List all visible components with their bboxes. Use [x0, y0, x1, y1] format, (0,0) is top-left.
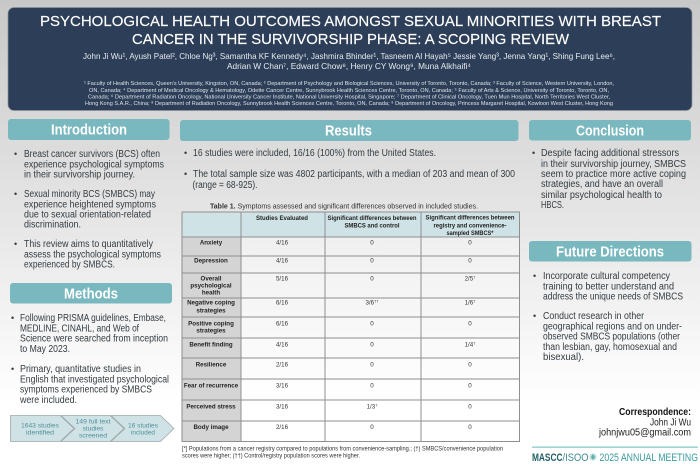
- authors: Adrian W Chan⁷, Edward Chow⁸, Henry CY Wong⁹, Muna Alkhaifi⁴: [227, 61, 471, 71]
- row: perceived stress: 1/3: [367, 404, 375, 410]
- footer: meeting logo: /ISOO: [562, 452, 589, 464]
- row: overall psychological health: 5/16: [276, 276, 289, 282]
- row: fear of recurrence: [184, 382, 472, 390]
- future directions bullets: •: [533, 311, 536, 321]
- correspondence: John Ji Wu: [650, 418, 691, 428]
- icon: meeting emblem: [589, 453, 597, 461]
- row: body image: 0: [370, 424, 374, 431]
- heading: methods: Methods: [64, 286, 118, 302]
- row: negative coping strategies: Negative coping: [187, 300, 235, 306]
- row: fear of recurrence: 0: [370, 382, 374, 390]
- row: fear of recurrence: 3/16: [276, 382, 289, 390]
- heading: conclusion: [529, 120, 691, 140]
- future directions bullets: than lesbian, gay, homosexual and: [543, 342, 677, 353]
- row: resilience: 2/16: [276, 362, 289, 368]
- conclusion bullet: in their survivorship journey, SMBCS: [541, 159, 686, 170]
- conclusion bullet: •: [532, 148, 535, 158]
- row: benefit finding: [189, 340, 475, 348]
- row: overall psychological health: 0: [370, 276, 374, 282]
- row: negative coping strategies: 6/16: [276, 300, 289, 306]
- chevron: full text screened: 149 full text: [76, 418, 111, 426]
- heading: future directions: Future Directions: [556, 244, 664, 260]
- row: body image: [193, 424, 472, 431]
- affiliations: ON, Canada; ⁴ Department of Medical Oncology & Hematology, Odette Cancer Centre, Sunnybrook Health Sciences Centre, Toronto, ON, Canada; ⁵ Faculty of Arts & Science, University of Toronto, Toronto, ON,: [89, 88, 609, 94]
- row: resilience: Resilience: [196, 362, 227, 368]
- methods bullets: symptoms experienced by SMBCS: [20, 384, 152, 396]
- heading: results: Results: [325, 122, 372, 140]
- row: overall psychological health: psychological: [190, 282, 232, 290]
- row: negative coping strategies: strategies: [196, 308, 226, 314]
- affiliations: Canada; ⁶ Department of Radiation Oncology, National University Cancer Institute, National University Hospital, Singapore; ⁷ Department of Clinical Oncology, Tuen Mun Hospital, North Territories West Cluster,: [88, 94, 610, 100]
- row: body image: 0: [468, 424, 472, 431]
- row: resilience: 0: [370, 362, 374, 368]
- chevron: studies included: 16 studies: [128, 422, 159, 430]
- row: overall psychological health: Overall: [201, 276, 222, 282]
- row: negative coping strategies: [187, 298, 475, 314]
- introduction bullets: experience psychological symptoms: [24, 160, 164, 170]
- row: fear of recurrence: 0: [468, 382, 472, 390]
- methods bullets: Science were searched from inception: [20, 334, 168, 344]
- row: anxiety: Anxiety: [200, 240, 223, 246]
- conclusion bullet: [532, 148, 686, 211]
- chevron: full text screened: screened: [79, 432, 107, 440]
- methods bullets: were included.: [19, 395, 77, 406]
- row: resilience: [196, 362, 472, 368]
- introduction bullets: This review aims to quantitatively: [24, 239, 153, 250]
- future directions bullets: [533, 271, 683, 363]
- future directions bullets: bisexual).: [543, 352, 584, 363]
- table header row: Studies Evaluated: [256, 215, 308, 222]
- future directions bullets: observed SMBCS populations (other: [543, 332, 681, 342]
- heading: introduction: [8, 119, 170, 140]
- flow chevrons: study selection: [10, 416, 174, 442]
- conclusion bullet: strategies, and have an overall: [541, 179, 663, 190]
- introduction bullets: assess the psychological symptoms: [24, 250, 161, 260]
- row: positive coping strategies: strategies: [196, 328, 226, 334]
- introduction bullets: [14, 149, 164, 270]
- future directions bullets: •: [533, 271, 536, 281]
- row: body image: Body image: [193, 424, 229, 431]
- row: overall psychological health: health: [202, 290, 220, 296]
- methods bullets: Primary, quantitative studies in: [20, 364, 141, 375]
- heading: methods: [10, 283, 172, 304]
- row: anxiety: [200, 240, 472, 246]
- introduction bullets: experience heightened symptoms: [24, 200, 156, 210]
- affiliations: Hong Kong S.A.R., China; ⁸ Department of Radiation Oncology, Sunnybrook Health Sciences Centre, Toronto, ON, Canada; ⁹ Department of Oncology, Princess Margaret Hospital, Kowloon West Cluster, Hong Kong: [85, 101, 613, 107]
- table footnote: scores were higher; (††) Control/registry population scores were higher.: [182, 452, 360, 460]
- authors: John Ji Wu¹, Ayush Patel², Chloe Ng³, Samantha KF Kennedy⁴, Jashmira Bhinder¹, Tasneem Al Hayah⁵ Jessie Yang³, Jenna Yang¹, Shing Fung Lee⁶,: [83, 51, 615, 61]
- table 1: symptoms and significant differences: [182, 212, 520, 442]
- row: overall psychological health: [190, 274, 475, 296]
- heading: future directions: [529, 241, 692, 262]
- chevron: studies identified: 1643 studies: [21, 422, 60, 430]
- methods bullets: to May 2023.: [20, 344, 70, 355]
- table header row: Significant differences between: [426, 214, 515, 222]
- row: anxiety: 0: [370, 240, 374, 246]
- methods bullets: [11, 313, 169, 406]
- chevron: studies included: included: [131, 430, 155, 436]
- row: negative coping strategies: †: [473, 298, 475, 304]
- row: resilience: 0: [468, 362, 472, 368]
- introduction bullets: due to sexual orientation-related: [24, 210, 151, 220]
- table caption: Table 1. Symptoms assessed and significant differences observed in included studies.: [210, 204, 478, 210]
- table footnote: [182, 446, 504, 460]
- introduction bullets: •: [14, 149, 17, 159]
- future directions bullets: Incorporate cultural competency: [543, 271, 670, 282]
- introduction bullets: in their survivorship journey.: [24, 170, 135, 180]
- row: benefit finding: 4/16: [276, 342, 289, 348]
- panel: future directions: [529, 241, 692, 363]
- introduction bullets: experienced by SMBCS.: [24, 260, 115, 270]
- conclusion bullet: Despite facing additional stressors: [541, 148, 679, 159]
- chevron: studies identified: [10, 416, 74, 442]
- conclusion bullet: HBCS.: [541, 200, 564, 211]
- correspondence: johnjwu05@gmail.com: [598, 428, 691, 438]
- row: depression: 0: [370, 258, 374, 264]
- introduction bullets: Breast cancer survivors (BCS) often: [24, 149, 160, 160]
- row: anxiety: 4/16: [276, 240, 289, 246]
- panel: conclusion: [529, 120, 691, 211]
- results bullets: •: [184, 148, 187, 158]
- row: perceived stress: 0: [468, 404, 472, 410]
- panel: introduction: [8, 119, 170, 270]
- row: perceived stress: [186, 402, 472, 410]
- header banner: [8, 8, 692, 110]
- row: overall psychological health: 2/5: [465, 276, 473, 282]
- results bullets: The total sample size was 4802 participants, with a median of 203 and mean of 300: [193, 169, 516, 180]
- introduction bullets: •: [14, 239, 17, 249]
- row: depression: [194, 258, 472, 264]
- panel: methods: [10, 283, 174, 442]
- title: CANCER IN THE SURVIVORSHIP PHASE: A SCOPING REVIEW: [132, 32, 569, 48]
- table footnote: [*] Populations from a cancer registry compared to populations from convenience-sampling.; (†) SMBCS/convenience population: [182, 446, 504, 452]
- row: negative coping strategies: ††: [374, 298, 379, 304]
- heading: results: [180, 120, 518, 141]
- conclusion bullet: similar psychological health to: [541, 190, 662, 201]
- row: depression: Depression: [194, 258, 228, 264]
- row: positive coping strategies: Positive coping: [188, 320, 234, 328]
- introduction bullets: •: [14, 189, 17, 199]
- methods bullets: Following PRISMA guidelines, Embase,: [20, 313, 166, 324]
- chevron: studies identified: identified: [26, 430, 54, 436]
- affiliations: [84, 81, 614, 107]
- footer: meeting logo: MASCC: [532, 452, 563, 464]
- chevron: full text screened: [61, 416, 124, 442]
- results bullets: •: [184, 169, 187, 179]
- correspondence: [598, 407, 691, 438]
- row: perceived stress: †: [375, 402, 377, 408]
- row: perceived stress: 3/16: [276, 404, 289, 410]
- row: benefit finding: †: [473, 340, 475, 346]
- results bullets: (range = 68-925).: [192, 180, 258, 191]
- row: overall psychological health: †: [473, 274, 475, 280]
- future directions bullets: training to better understand and: [543, 282, 674, 292]
- introduction bullets: Sexual minority BCS (SMBCS) may: [24, 189, 155, 200]
- introduction bullets: discrimination.: [24, 220, 81, 230]
- methods bullets: •: [11, 313, 14, 323]
- row: benefit finding: 0: [370, 342, 374, 348]
- row: benefit finding: 1/4: [465, 342, 473, 348]
- future directions bullets: address the unique needs of SMBCS: [543, 292, 683, 302]
- chevron: full text screened: studies: [82, 426, 104, 432]
- future directions bullets: Conduct research in other: [543, 311, 645, 322]
- row: anxiety: 0: [468, 240, 472, 246]
- results bullets: 16 studies were included, 16/16 (100%) from the United States.: [193, 148, 436, 159]
- table header row: SMBCS and control: [344, 222, 400, 230]
- row: benefit finding: Benefit finding: [189, 342, 233, 348]
- future directions bullets: geographical regions and on under-: [543, 322, 682, 332]
- row: depression: 4/16: [276, 258, 289, 264]
- table header row: Significant differences between: [328, 215, 417, 222]
- row: positive coping strategies: 6/16: [276, 320, 289, 328]
- row: positive coping strategies: 0: [468, 320, 472, 328]
- methods bullets: MEDLINE, CINAHL, and Web of: [20, 324, 139, 334]
- table header row: sampled SMBCS*: [446, 230, 494, 237]
- row: body image: 2/16: [276, 424, 289, 431]
- row: negative coping strategies: 3/6: [365, 300, 374, 306]
- panel: results: [180, 120, 520, 460]
- conclusion bullet: seem to practice more active coping: [541, 169, 686, 180]
- affiliations: ¹ Faculty of Health Sciences, Queen's University, Kingston, ON, Canada; ² Department of Psychology and Biological Sciences, University of Toronto, Toronto, Canada; ³ Faculty of Science, Western University, London,: [84, 81, 614, 87]
- heading: conclusion: Conclusion: [576, 122, 644, 140]
- authors: [83, 51, 615, 71]
- chevron: studies included: [111, 416, 174, 442]
- heading: introduction: Introduction: [51, 122, 127, 138]
- methods bullets: •: [11, 364, 14, 374]
- table header row: [256, 214, 515, 237]
- title: PSYCHOLOGICAL HEALTH OUTCOMES AMONGST SEXUAL MINORITIES WITH BREAST: [40, 14, 661, 30]
- row: positive coping strategies: 0: [370, 320, 374, 328]
- row: perceived stress: Perceived stress: [186, 404, 236, 410]
- row: negative coping strategies: 1/6: [465, 300, 473, 306]
- row: depression: 0: [468, 258, 472, 264]
- footer: meeting logo: [532, 446, 698, 464]
- row: positive coping strategies: [188, 320, 472, 334]
- row: fear of recurrence: Fear of recurrence: [184, 382, 239, 390]
- methods bullets: English that investigated psychological: [20, 374, 169, 386]
- correspondence: Correspondence:: [619, 407, 691, 418]
- title: [40, 14, 661, 48]
- results bullets: [184, 148, 516, 191]
- table header row: registry and convenience-: [434, 222, 506, 230]
